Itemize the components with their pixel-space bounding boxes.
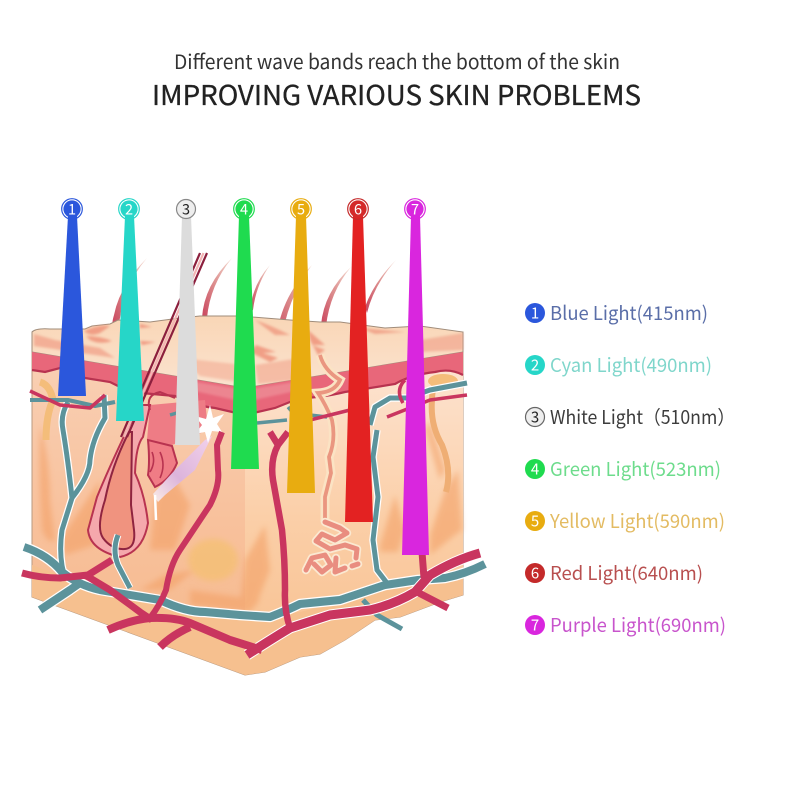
right face of the block xyxy=(245,360,463,675)
purple streak xyxy=(153,436,212,502)
sweat gland duct xyxy=(318,355,340,522)
legend: purple light: Purple Light(690nm) xyxy=(550,611,726,638)
subtitle: Different wave bands reach the bottom of the skin xyxy=(174,46,620,75)
hairs above the skin xyxy=(112,258,396,348)
crimson blood vessels xyxy=(22,380,480,655)
yellow fat blob xyxy=(188,539,238,581)
light beam 1: blue: 1 xyxy=(68,198,76,220)
light beam 7: purple xyxy=(402,198,429,555)
legend: cyan light: 2 xyxy=(531,354,539,376)
light beam 4: green xyxy=(231,198,259,469)
fat and capillary patches xyxy=(39,420,462,612)
legend: white light: White Light（510nm） xyxy=(550,403,735,430)
light beam 3: white xyxy=(175,198,200,445)
legend: red light: 6 xyxy=(531,562,539,584)
epidermis top surface xyxy=(32,316,463,388)
title: IMPROVING VARIOUS SKIN PROBLEMS xyxy=(152,73,641,113)
legend: yellow light: Yellow Light(590nm) xyxy=(549,507,725,534)
skin cross-section illustration xyxy=(22,253,485,675)
legend: blue light: Blue Light(415nm) xyxy=(550,299,708,326)
sparkle xyxy=(195,405,224,443)
legend: cyan light: Cyan Light(490nm) xyxy=(550,351,712,378)
skin block body xyxy=(32,332,463,675)
sweat gland coil xyxy=(306,522,358,572)
light beam 2: cyan xyxy=(116,198,144,421)
epidermis pink patches xyxy=(34,320,463,384)
light beam 4: green: 4 xyxy=(240,198,248,220)
light beam 7: purple: 7 xyxy=(411,198,419,220)
legend: yellow light: 5 xyxy=(531,510,539,532)
legend: white light: 3 xyxy=(531,406,539,428)
light beam 2: cyan: 2 xyxy=(125,198,133,220)
light beam 5: yellow: 5 xyxy=(297,198,305,220)
light beam 6: red: 6 xyxy=(354,198,362,220)
legend: green light: Green Light(523nm) xyxy=(550,455,721,482)
light beam 5: yellow xyxy=(287,198,315,493)
legend: green light: 4 xyxy=(531,458,539,480)
right sweat duct xyxy=(432,379,448,492)
teal blood vessels xyxy=(24,383,485,629)
legend: red light: Red Light(640nm) xyxy=(550,559,703,586)
legend: purple light: 7 xyxy=(531,614,539,636)
lower band of the block xyxy=(32,565,463,675)
left sweat duct xyxy=(40,382,53,440)
light beam 1: blue xyxy=(58,198,86,396)
light beam 3: white: 3 xyxy=(182,198,190,220)
light beam 6: red xyxy=(345,198,373,522)
red dermal band xyxy=(32,352,463,415)
legend: blue light: 1 xyxy=(531,302,539,324)
hair shaft and follicle xyxy=(88,253,208,557)
